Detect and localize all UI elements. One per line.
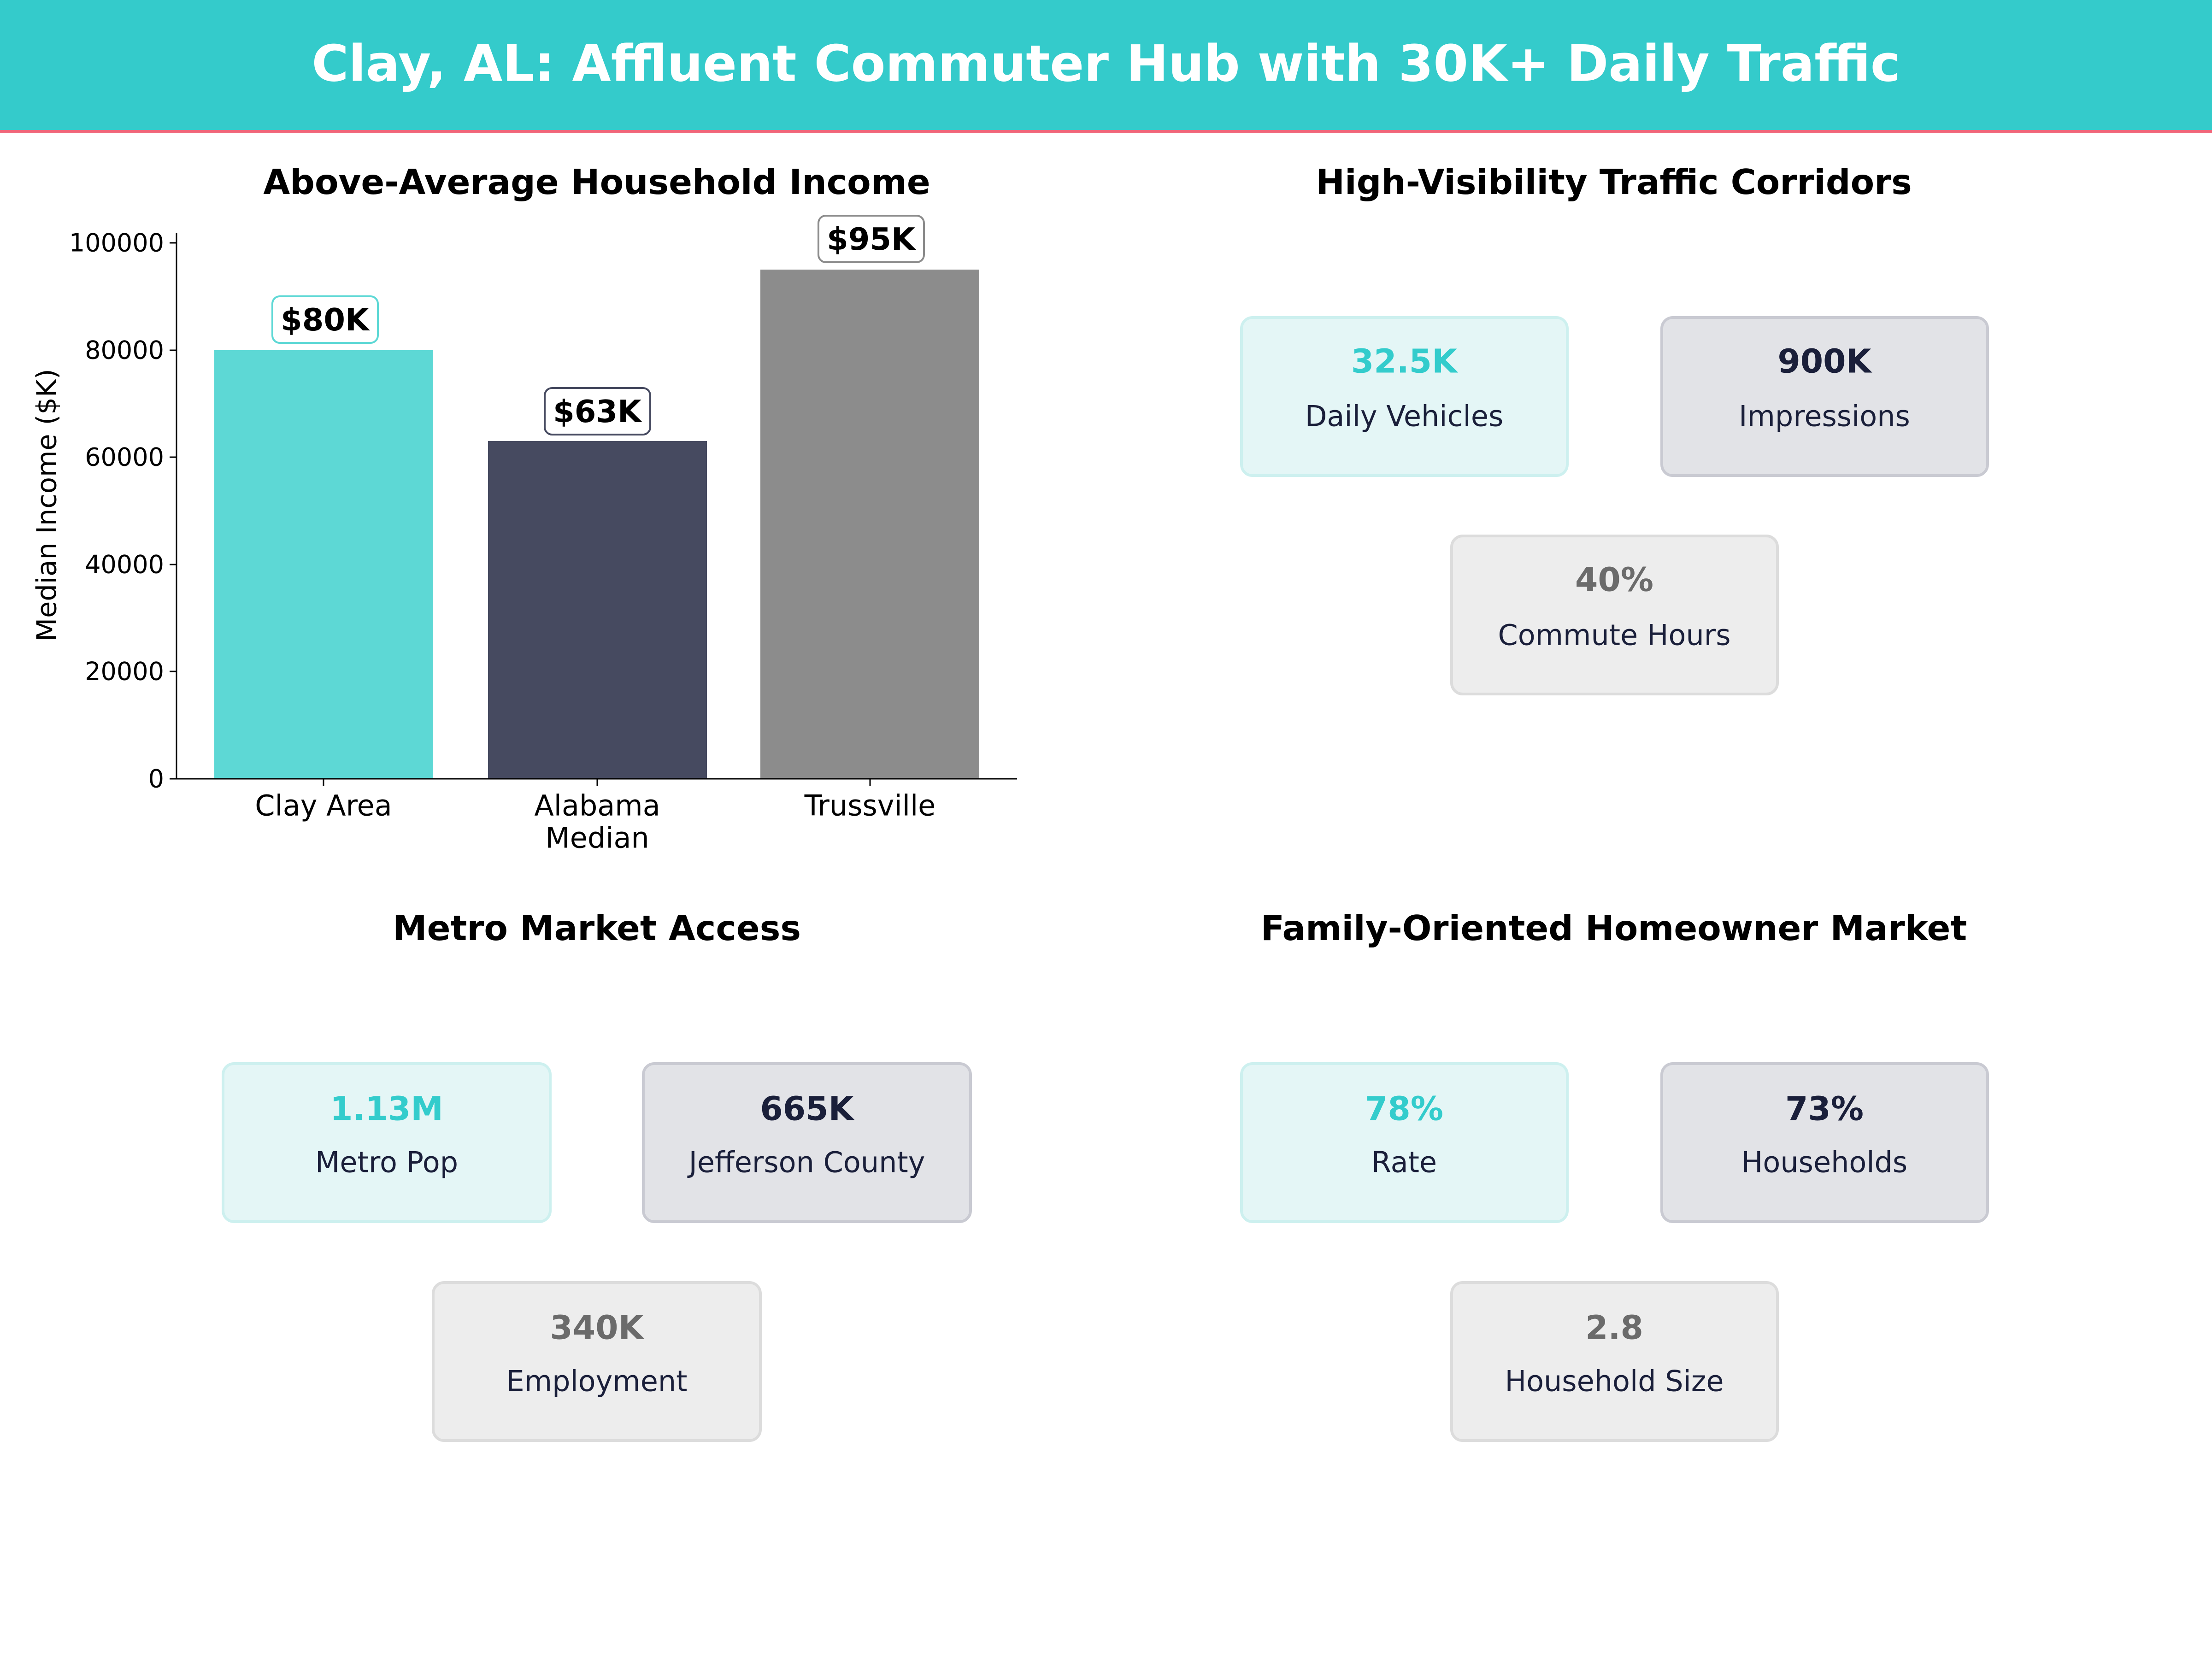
heading: traffic: High-Visibility Traffic Corridors <box>1316 162 1912 202</box>
card: metro pop: Metro Pop <box>315 1146 458 1179</box>
bar chart: Alabama <box>534 789 660 822</box>
card: rate: Rate <box>1371 1146 1437 1179</box>
card: households: Households <box>1741 1146 1907 1179</box>
value labels: $95K <box>827 221 916 257</box>
title: Clay, AL: Affluent Commuter Hub with 30K+ Daily Traffic <box>312 34 1900 93</box>
card: metro pop: 1.13M <box>330 1089 443 1128</box>
card: employment: Employment <box>506 1364 687 1398</box>
bar chart: Median Income ($K) <box>30 369 63 641</box>
bar chart: 80000 <box>85 335 164 365</box>
bar chart: 0 <box>148 764 164 794</box>
card: daily vehicles: Daily Vehicles <box>1305 399 1503 433</box>
header banner <box>0 0 2212 133</box>
card: commute hours <box>1452 536 1777 694</box>
bar chart: Median <box>545 821 649 854</box>
card: commute hours: Commute Hours <box>1498 618 1731 652</box>
card: jefferson county: Jefferson County <box>687 1146 925 1179</box>
bar chart: 60000 <box>85 442 164 472</box>
bar chart: 20000 <box>85 657 164 686</box>
heading: family: Family-Oriented Homeowner Market <box>1261 908 1967 948</box>
card: employment: 340K <box>550 1309 645 1347</box>
card: employment <box>433 1282 760 1441</box>
value labels: $63K <box>553 394 642 429</box>
bar chart: Trussville <box>804 789 935 822</box>
card: households <box>1662 1064 1988 1222</box>
bar chart: 100000 <box>69 229 164 257</box>
card: impressions <box>1662 318 1988 476</box>
panel: household income chart <box>30 162 1017 854</box>
bar chart: 40000 <box>85 550 164 579</box>
panel: metro market access <box>223 908 971 1441</box>
card: jefferson county <box>643 1064 971 1222</box>
card: rate <box>1241 1064 1567 1222</box>
panel: traffic corridors <box>1241 162 1988 694</box>
card: metro pop <box>223 1064 550 1222</box>
card: daily vehicles <box>1241 318 1567 476</box>
card: impressions: 900K <box>1777 342 1873 381</box>
bar chart: Clay Area <box>255 789 392 822</box>
card: daily vehicles: 32.5K <box>1351 342 1459 381</box>
heading: income: Above-Average Household Income <box>263 162 930 202</box>
value labels: $80K <box>281 302 370 338</box>
card: household size <box>1452 1282 1777 1441</box>
card: commute hours: 40% <box>1575 560 1653 599</box>
card: impressions: Impressions <box>1739 399 1910 433</box>
heading: metro: Metro Market Access <box>393 908 801 948</box>
card: rate: 78% <box>1365 1089 1443 1128</box>
card: jefferson county: 665K <box>760 1089 855 1128</box>
bar chart <box>30 216 1017 854</box>
card: household size: Household Size <box>1505 1364 1724 1398</box>
value labels <box>272 216 924 435</box>
card: household size: 2.8 <box>1585 1309 1643 1347</box>
panel: family homeowner market <box>1241 908 1988 1441</box>
card: households: 73% <box>1785 1089 1864 1128</box>
